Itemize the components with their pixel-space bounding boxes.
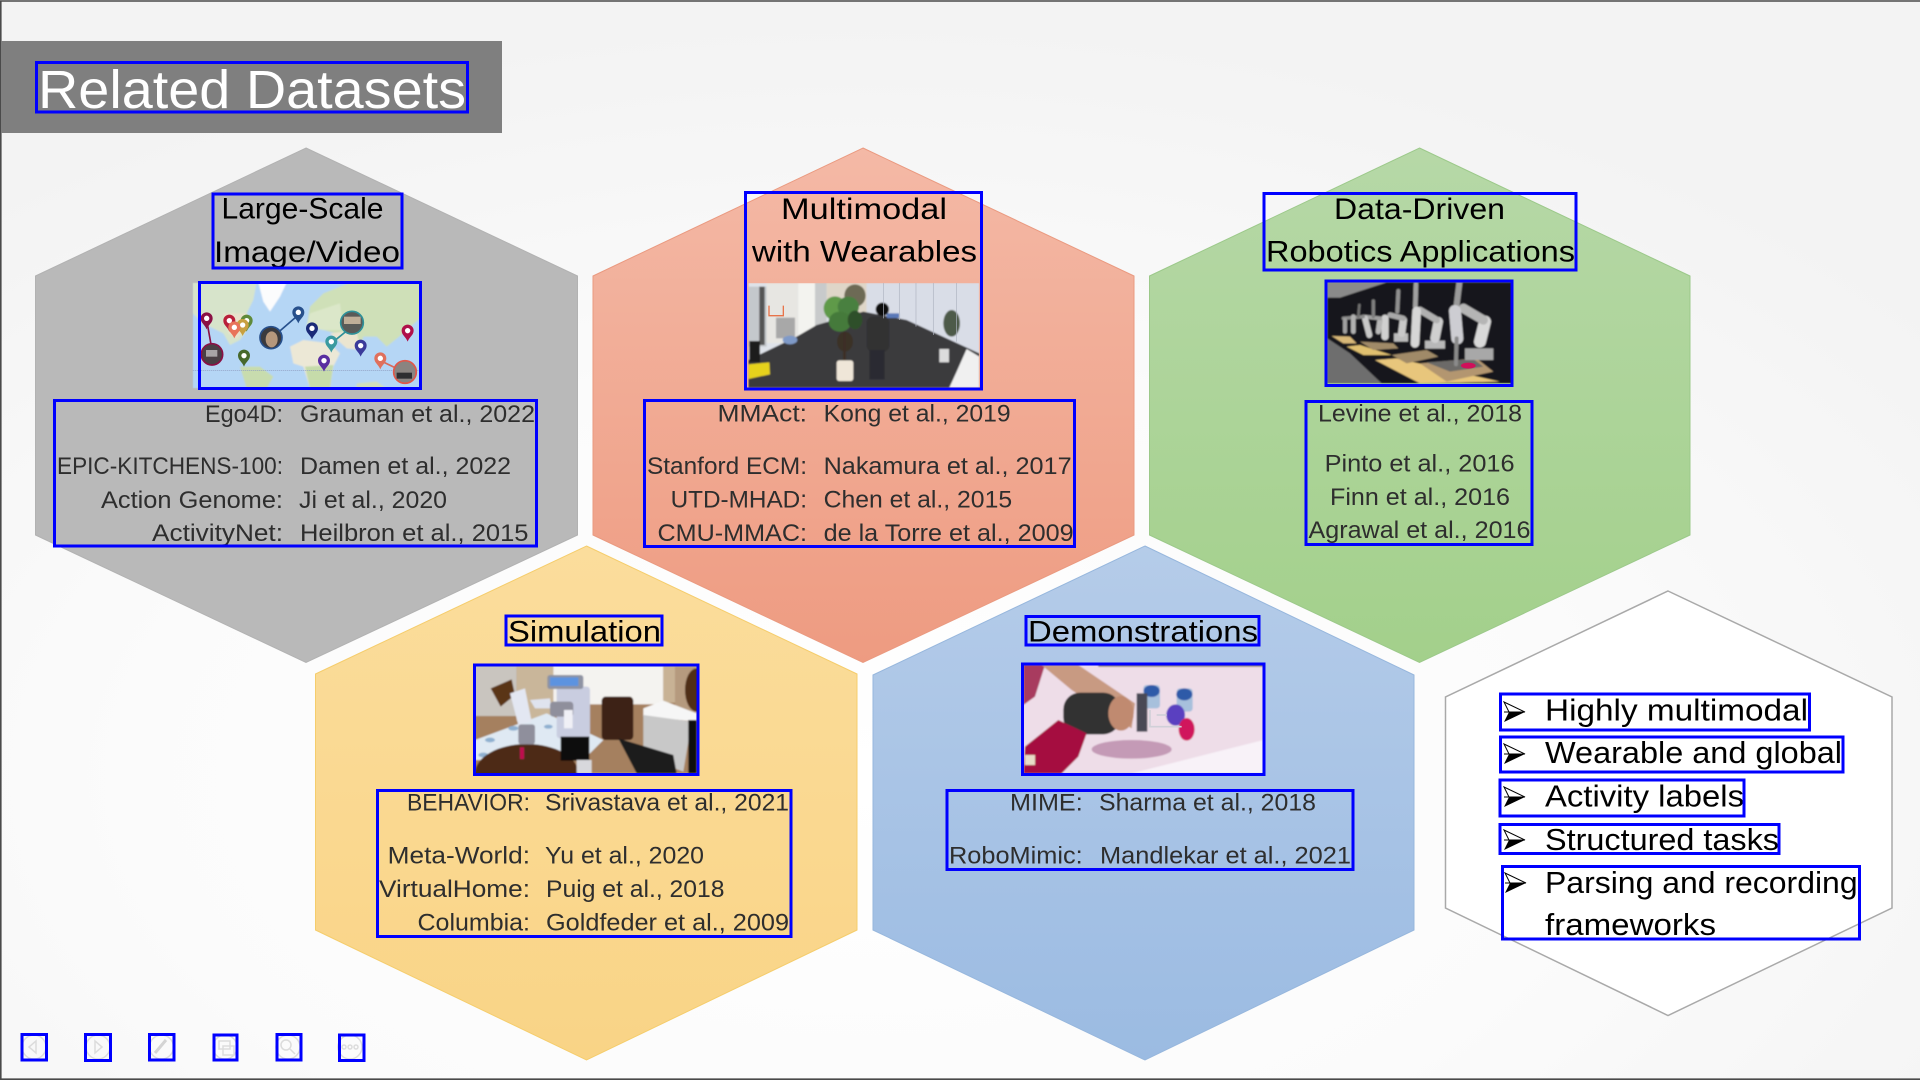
icon: slides	[213, 1035, 237, 1060]
reference list: robotics: Agrawal et al., 2016	[1308, 517, 1530, 544]
panel: key properties	[1446, 591, 1892, 1016]
dataset list: simulation: Srivastava et al., 2021	[545, 790, 789, 817]
dataset list: large-scale: Damen et al., 2022	[300, 453, 511, 480]
heading: data-driven robotics applications: Robotics Applications	[1266, 236, 1575, 268]
icon: more	[338, 1035, 364, 1060]
bullet: highly multimodal: Highly multimodal	[1545, 693, 1808, 728]
dataset list: multimodal: Nakamura et al., 2017	[824, 453, 1072, 480]
dataset list: simulation: VirtualHome:	[379, 876, 530, 903]
heading and image: multimodal with wearables: with Wearables	[751, 236, 977, 268]
dataset list: large-scale: Heilbron et al., 2015	[300, 520, 528, 547]
icon: search	[276, 1034, 301, 1060]
dataset list: large-scale: ActivityNet:	[152, 520, 283, 547]
dataset list: large-scale: Ego4D:	[205, 401, 283, 428]
reference list: robotics: Finn et al., 2016	[1330, 484, 1510, 511]
bullet: parsing and recording frameworks: Parsing and recording	[1545, 865, 1858, 900]
bullet: activity labels: Activity labels	[1545, 778, 1744, 814]
panel: simulation	[316, 546, 857, 1060]
dataset list: simulation: Columbia:	[418, 910, 530, 936]
dataset list: large-scale: Grauman et al., 2022	[300, 401, 535, 428]
dataset list: multimodal: Kong et al., 2019	[824, 400, 1011, 428]
dataset list: large-scale	[54, 400, 536, 547]
dataset list: multimodal: Stanford ECM:	[647, 453, 807, 480]
image: world map with pins	[193, 282, 422, 388]
icon: next	[86, 1034, 110, 1060]
dataset list: simulation: Yu et al., 2020	[545, 842, 704, 870]
heading: demonstrations: Demonstrations	[1028, 616, 1258, 649]
dataset list: simulation: Puig et al., 2018	[546, 876, 724, 903]
dataset list: demonstrations: Mandlekar et al., 2021	[1100, 842, 1351, 870]
reference list: robotics	[1306, 400, 1532, 544]
bullet: wearable and global: Wearable and global	[1545, 735, 1842, 770]
heading: data-driven robotics applications	[1264, 193, 1576, 270]
heading: simulation: Simulation	[508, 616, 661, 649]
heading: large-scale image/video: Image/Video	[214, 236, 400, 269]
dataset list: multimodal	[644, 400, 1074, 547]
icon: previous	[22, 1034, 46, 1060]
heading: large-scale image/video	[213, 192, 402, 269]
dataset list: large-scale: Action Genome:	[101, 487, 283, 514]
dataset list: demonstrations: RoboMimic:	[949, 842, 1083, 870]
image: robot arms at tables	[1326, 281, 1512, 386]
image: simulated home robot	[473, 664, 700, 776]
dataset list: large-scale: EPIC-KITCHENS-100:	[57, 453, 283, 480]
dataset list: multimodal: MMAct:	[718, 400, 807, 428]
dataset list: demonstrations	[947, 790, 1353, 870]
bullet: structured tasks: Structured tasks	[1545, 822, 1779, 857]
bullet: parsing and recording frameworks	[1502, 865, 1860, 942]
heading and image: multimodal with wearables	[746, 192, 982, 389]
image: human-guided robot gripper	[1022, 664, 1264, 774]
dataset list: simulation: Goldfeder et al., 2009	[546, 910, 789, 936]
dataset list: simulation	[378, 790, 791, 936]
reference list: robotics: Levine et al., 2018	[1318, 400, 1522, 428]
panel: multimodal with wearables	[593, 148, 1134, 662]
dataset list: multimodal: CMU-MMAC:	[658, 520, 807, 547]
heading: data-driven robotics applications: Data-Driven	[1334, 193, 1505, 226]
dataset list: demonstrations: MIME:	[1010, 790, 1083, 817]
heading and image: multimodal with wearables: Multimodal	[781, 193, 947, 226]
title: Related Datasets	[38, 60, 466, 120]
bullet: parsing and recording frameworks: frameworks	[1545, 907, 1716, 942]
reference list: robotics: Pinto et al., 2016	[1325, 451, 1515, 478]
dataset list: simulation: Meta-World:	[388, 842, 530, 870]
dataset list: large-scale: Ji et al., 2020	[299, 487, 447, 514]
panel: large-scale image/video	[36, 148, 578, 662]
icon: pen	[150, 1034, 174, 1060]
navigation icons	[22, 1034, 364, 1060]
title banner	[1, 41, 502, 133]
dataset list: simulation: BEHAVIOR:	[407, 790, 530, 817]
dataset list: multimodal: Chen et al., 2015	[824, 486, 1012, 514]
dataset list: multimodal: UTD-MHAD:	[671, 486, 807, 514]
dataset list: multimodal: de la Torre et al., 2009	[824, 520, 1074, 547]
dataset list: demonstrations: Sharma et al., 2018	[1099, 790, 1316, 817]
panel: demonstrations	[873, 546, 1414, 1060]
heading: large-scale image/video: Large-Scale	[222, 192, 384, 226]
panel: data-driven robotics	[1150, 148, 1690, 662]
